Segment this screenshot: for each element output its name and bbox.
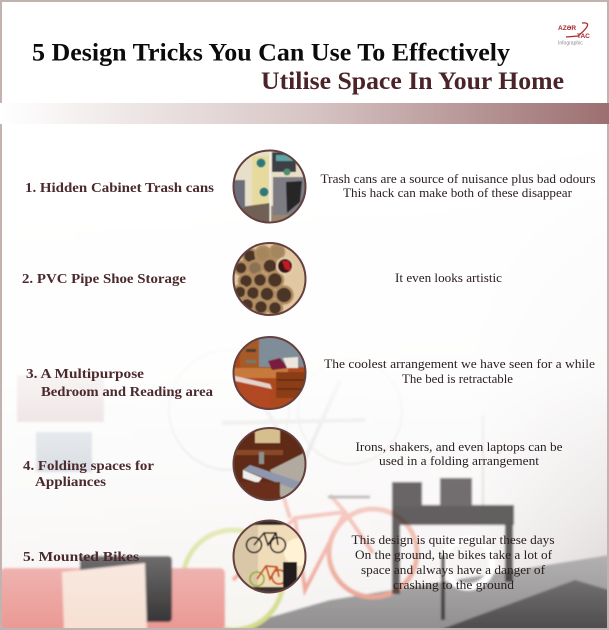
item 4 image ring [234,428,306,500]
item 2 image: pipe shoe storage [233,242,306,315]
item 5 description: crashing to the ground [393,577,515,592]
logo: AZƏR [558,25,576,32]
item 5 description: space and always have a danger of [361,562,546,577]
item 3 heading: 3. A Multipurpose [26,367,144,382]
item 5 description: On the ground, the bikes take a lot of [355,547,553,562]
item 3 description: The coolest arrangement we have seen for a while [324,356,595,371]
item 3 heading [26,367,213,400]
gradient header band [0,103,609,124]
item 4 heading: Appliances [35,475,107,490]
item 1 description: This hack can make both of these disappear [343,185,573,200]
item 5 description [352,532,554,592]
item 5 description: This design is quite regular these days [352,532,554,547]
title: 5 Design Tricks You Can Use To Effectively [32,40,511,66]
item 5 image: mounted bikes [234,522,304,592]
item 4 heading [23,459,154,490]
item 1 description [320,171,596,200]
logo [558,23,590,46]
item 3 description: The bed is retractable [402,371,513,386]
item 2 image ring [234,243,306,315]
title [32,40,564,95]
item 2 heading: 2. PVC Pipe Shoe Storage [22,272,186,287]
item 4 description: Irons, shakers, and even laptops can be [356,439,563,454]
item 3 image: retractable bed [233,337,306,410]
item 4 heading: 4. Folding spaces for [23,459,154,474]
item 3 image ring [234,337,306,409]
item 1 image: hidden trash cabinet [233,150,306,223]
item 3 description [324,356,595,386]
item 3 heading: Bedroom and Reading area [41,385,213,400]
logo: TAC [577,33,590,40]
logo: Infographic [558,40,583,46]
item 4 image: folding ironing board [233,428,306,501]
item 5 image ring [234,520,306,592]
item 1 heading: 1. Hidden Cabinet Trash cans [25,181,215,196]
item 2 description: It even looks artistic [395,270,502,285]
item 5 heading: 5. Mounted Bikes [23,550,140,565]
item 4 description [356,439,563,468]
item 1 description: Trash cans are a source of nuisance plus bad odours [320,171,596,186]
item 1 image ring [234,150,306,222]
item 4 description: used in a folding arrangement [379,453,539,468]
title: Utilise Space In Your Home [261,68,564,95]
